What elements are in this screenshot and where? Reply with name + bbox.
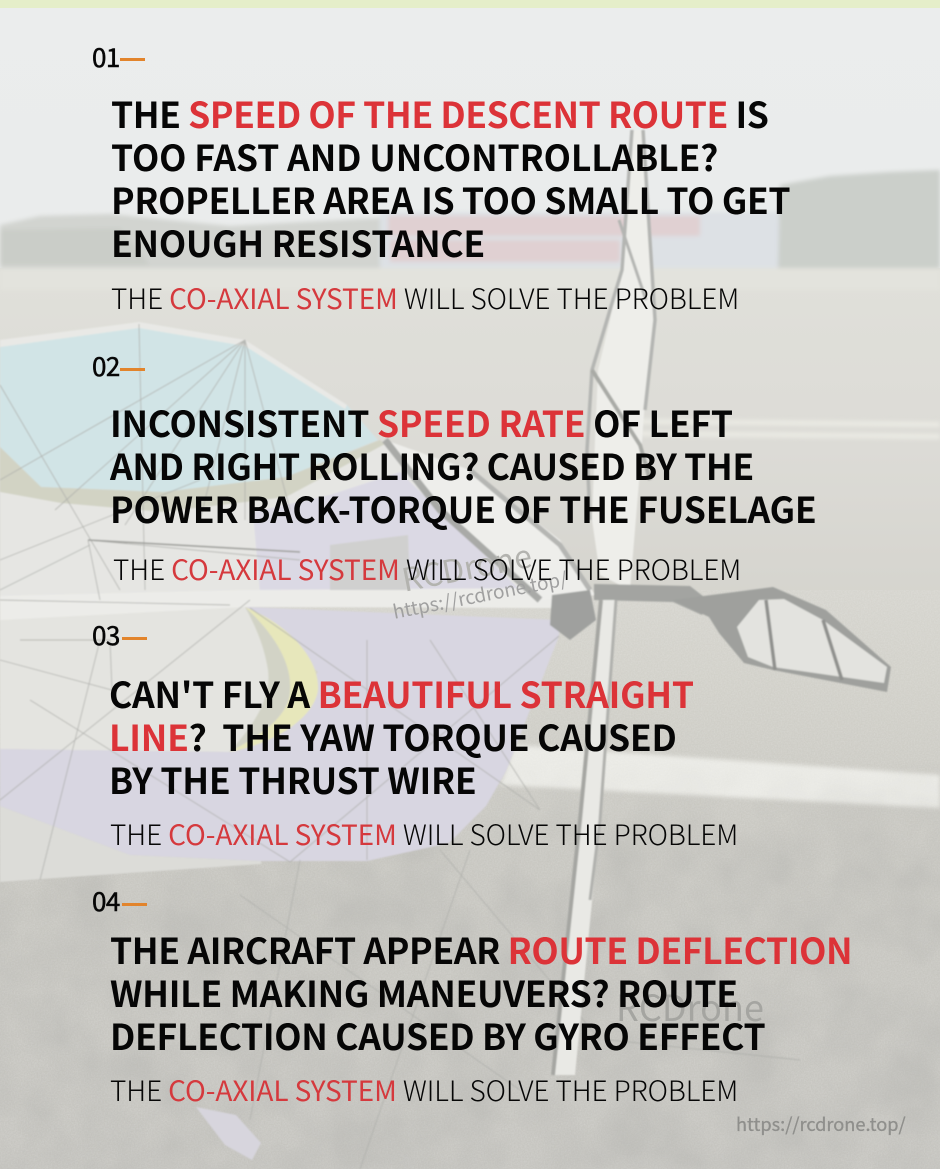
heading 02: INCONSISTENT SPEED RATE OF LEFT <box>110 397 733 448</box>
frame line <box>88 540 300 552</box>
heading 03 <box>109 668 694 805</box>
heading 01: TOO FAST AND UNCONTROLLABLE? <box>111 131 718 182</box>
dash <box>122 637 147 640</box>
heading 01: THE SPEED OF THE DESCENT ROUTE IS <box>111 88 768 139</box>
number 04: 04 <box>92 882 120 919</box>
lower left white wing <box>0 607 282 752</box>
watermark url center: https://rcdrone.top/ <box>390 564 569 625</box>
ground fin <box>196 1107 261 1160</box>
camera box <box>330 535 410 590</box>
heading 01: PROPELLER AREA IS TOO SMALL TO GET <box>111 174 790 225</box>
hub <box>550 590 596 640</box>
fuselage arm <box>594 584 708 615</box>
heading 01: ENOUGH RESISTANCE <box>111 217 485 268</box>
heading 04 <box>110 924 852 1061</box>
lavender wing panel <box>0 607 559 861</box>
section 02 <box>92 347 817 589</box>
blue wing <box>0 326 378 492</box>
section 01 <box>92 38 790 318</box>
heading 03: CAN'T FLY A BEAUTIFUL STRAIGHT <box>109 668 694 719</box>
heading 04: THE AIRCRAFT APPEAR ROUTE DEFLECTION <box>110 924 852 975</box>
number 01: 01 <box>92 38 120 75</box>
subtext 01: THE CO-AXIAL SYSTEM WILL SOLVE THE PROBLEM <box>111 278 739 318</box>
dash <box>120 368 145 370</box>
dash <box>120 58 145 60</box>
number 02: 02 <box>92 347 120 384</box>
heading 03: BY THE THRUST WIRE <box>109 754 476 805</box>
heading 03: LINE? THE YAW TORQUE CAUSED <box>109 711 677 762</box>
section 03 <box>92 616 738 854</box>
heading 01 <box>111 88 790 268</box>
white spar wing <box>0 588 560 632</box>
heading 02: AND RIGHT ROLLING? CAUSED BY THE <box>110 440 754 491</box>
heading 02: POWER BACK-TORQUE OF THE FUSELAGE <box>110 483 817 534</box>
section 04 <box>92 882 852 1110</box>
yellow crescent <box>229 607 318 752</box>
heading 04: DEFLECTION CAUSED BY GYRO EFFECT <box>110 1010 765 1061</box>
heading 04: WHILE MAKING MANEUVERS? ROUTE <box>110 967 738 1018</box>
lavender fuselage upper <box>253 472 520 592</box>
lower white wing <box>0 440 530 600</box>
watermark url bottom right: https://rcdrone.top/ <box>736 1111 906 1137</box>
wing edge band <box>0 440 385 512</box>
lower edge strip <box>0 806 261 882</box>
dash <box>122 903 147 906</box>
subtext 03: THE CO-AXIAL SYSTEM WILL SOLVE THE PROBLEM <box>110 814 738 854</box>
heading 02 <box>110 397 817 534</box>
lower propeller blade <box>385 440 595 600</box>
subtext 04: THE CO-AXIAL SYSTEM WILL SOLVE THE PROBLEM <box>110 1070 738 1110</box>
upper propeller blade <box>592 130 655 590</box>
faint watermark RCDrone center: RCDrone <box>398 531 535 602</box>
wing outer rim <box>0 322 347 409</box>
vertical strut <box>553 600 616 1075</box>
subtext 02: THE CO-AXIAL SYSTEM WILL SOLVE THE PROBLEM <box>113 549 741 589</box>
number 03: 03 <box>92 616 120 653</box>
tail fin <box>673 587 891 692</box>
watermark RCDrone: RCDrone <box>616 980 764 1032</box>
